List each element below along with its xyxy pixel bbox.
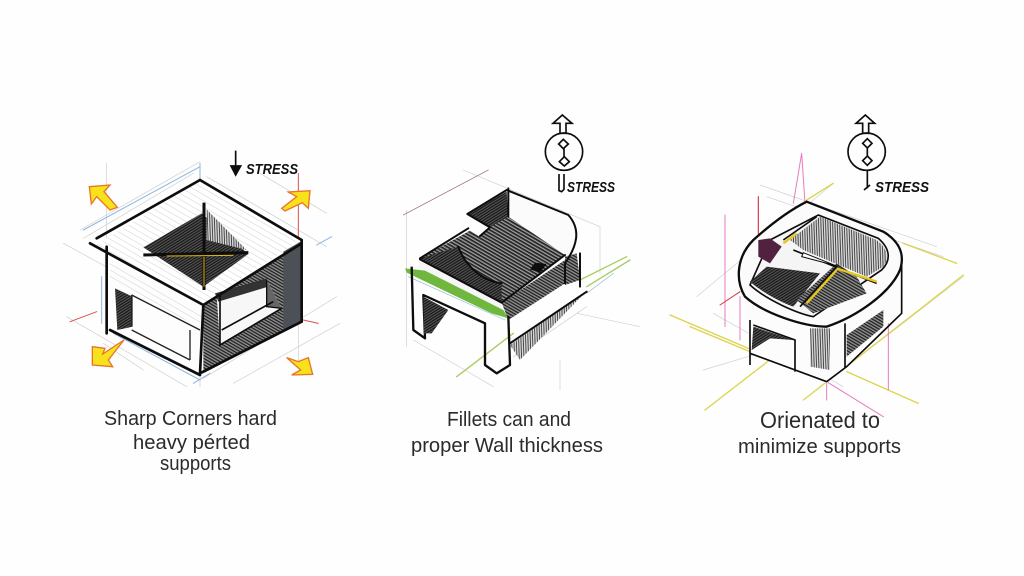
caption: sharp corners: supports <box>160 453 231 475</box>
front band and green accent <box>408 262 507 320</box>
rounded rim <box>739 202 902 327</box>
construction lines <box>670 153 963 417</box>
arrow: top left <box>89 185 117 210</box>
arrow: bottom right <box>287 358 313 375</box>
caption: fillets: Fillets can and <box>447 409 571 431</box>
caption: oriented <box>738 407 901 458</box>
sketch 2: filleted block <box>403 115 640 390</box>
lower body <box>745 263 902 383</box>
stress arrow <box>231 151 241 175</box>
sketch 3: rounded oriented block <box>670 115 963 417</box>
legs <box>412 267 510 373</box>
caption: fillets: proper Wall thickness <box>411 435 603 457</box>
small slot <box>530 263 547 273</box>
right wall with window <box>203 243 302 373</box>
caption: fillets <box>411 409 603 457</box>
arrow: top right <box>282 191 310 211</box>
caption: sharp corners <box>104 408 277 475</box>
stress symbol <box>545 115 583 192</box>
label: stress, sketch 3: STRESS <box>875 179 929 196</box>
label: stress, sketch 1: STRESS <box>246 161 298 178</box>
caption: oriented: minimize supports <box>738 436 901 458</box>
caption: sharp corners: heavy pérted <box>133 432 250 454</box>
back wall <box>508 189 576 257</box>
internal ribs <box>783 217 877 307</box>
label: stress, sketch 2: STRESS <box>567 179 615 196</box>
left wall <box>107 253 203 373</box>
stress symbol <box>848 115 885 190</box>
right wall <box>502 260 565 320</box>
construction lines <box>63 162 340 387</box>
recessed pit <box>143 203 248 290</box>
caption: oriented: Orienated to <box>760 407 880 433</box>
inner cavity <box>750 215 888 317</box>
construction lines <box>403 170 640 390</box>
sketch 1: sharp corner block <box>63 151 340 387</box>
caption: sharp corners: Sharp Corners hard <box>104 408 277 430</box>
floor hatched <box>420 217 565 303</box>
arrow: bottom left <box>92 340 124 367</box>
heavy outlines <box>90 180 302 375</box>
top face <box>97 180 302 303</box>
